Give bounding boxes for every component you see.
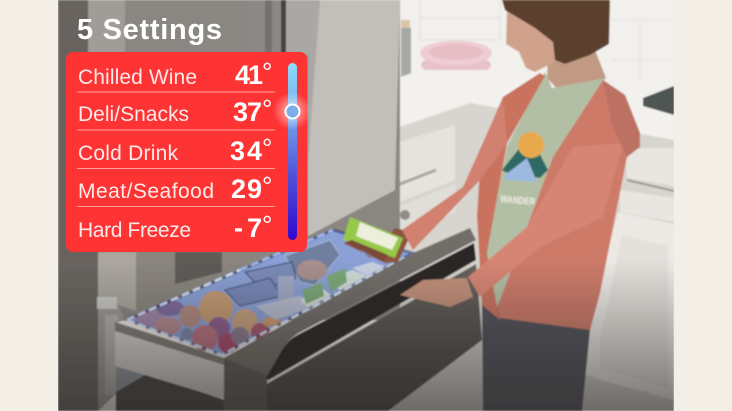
shirt graphic: WANDER: [500, 194, 536, 208]
row dividers: [77, 92, 275, 206]
row: Chilled Wine: [78, 57, 272, 90]
row: Hard Freeze: °: [262, 210, 272, 240]
juice box and hand: [343, 217, 412, 263]
drawer underside: [115, 374, 225, 411]
bottom fade: [58, 260, 674, 411]
panel: temperature settings: [66, 52, 311, 252]
drawer handle recess: [266, 243, 476, 380]
person: t-shirt: [487, 72, 606, 307]
food: fruit: [136, 291, 282, 353]
row: Deli/Snacks: 37: [233, 97, 262, 127]
row: Cold Drink: °: [262, 133, 272, 163]
row: Meat/Seafood: 29: [231, 174, 262, 204]
fridge lower door: [98, 236, 310, 311]
fridge right door: [308, 0, 400, 236]
row: Meat/Seafood: Meat/Seafood: [78, 180, 214, 203]
title: 5 Settings: [77, 14, 222, 46]
drawer left cavity: [98, 300, 125, 411]
row: Hard Freeze: Hard Freeze: [78, 219, 191, 242]
temperature slider: [273, 63, 311, 240]
fridge upper left body: [98, 0, 401, 321]
drawer interior, blue: [127, 230, 413, 355]
floor: [390, 376, 674, 411]
row: Hard Freeze: -7: [234, 213, 262, 243]
row: Chilled Wine: °: [262, 57, 272, 87]
cabinets: [400, 102, 674, 324]
row: Chilled Wine: 41: [235, 60, 263, 90]
row: Deli/Snacks: [78, 94, 272, 127]
shirt graphic: [500, 132, 548, 208]
person: legs: [482, 300, 590, 411]
food: containers: [285, 240, 340, 285]
person: hair: [502, 0, 610, 64]
drawer front face: [267, 264, 482, 411]
row: Deli/Snacks: °: [262, 94, 272, 124]
person: neck: [547, 50, 606, 92]
person: face: [506, 10, 560, 72]
tray: [643, 86, 674, 115]
person: front hand: [400, 278, 473, 307]
vase: [401, 28, 411, 80]
pink plates: [420, 40, 492, 70]
row: Cold Drink: [78, 133, 272, 166]
drawer front left post: [223, 358, 268, 411]
row: Cold Drink: 34: [230, 136, 262, 166]
row: Meat/Seafood: [78, 171, 272, 204]
food: boxes: [256, 296, 316, 320]
row: Cold Drink: Cold Drink: [78, 142, 178, 165]
row: Meat/Seafood: °: [262, 171, 272, 201]
drawer top rim: [224, 228, 476, 376]
drawer side rail: [114, 331, 224, 398]
person: hoodie: [402, 73, 640, 330]
row: Chilled Wine: Chilled Wine: [78, 66, 197, 89]
row: Hard Freeze: [78, 210, 272, 243]
glowing dashed border: [127, 230, 413, 355]
kitchen wall: [400, 0, 674, 94]
row: Deli/Snacks: Deli/Snacks: [78, 103, 189, 126]
countertop: [400, 70, 642, 134]
